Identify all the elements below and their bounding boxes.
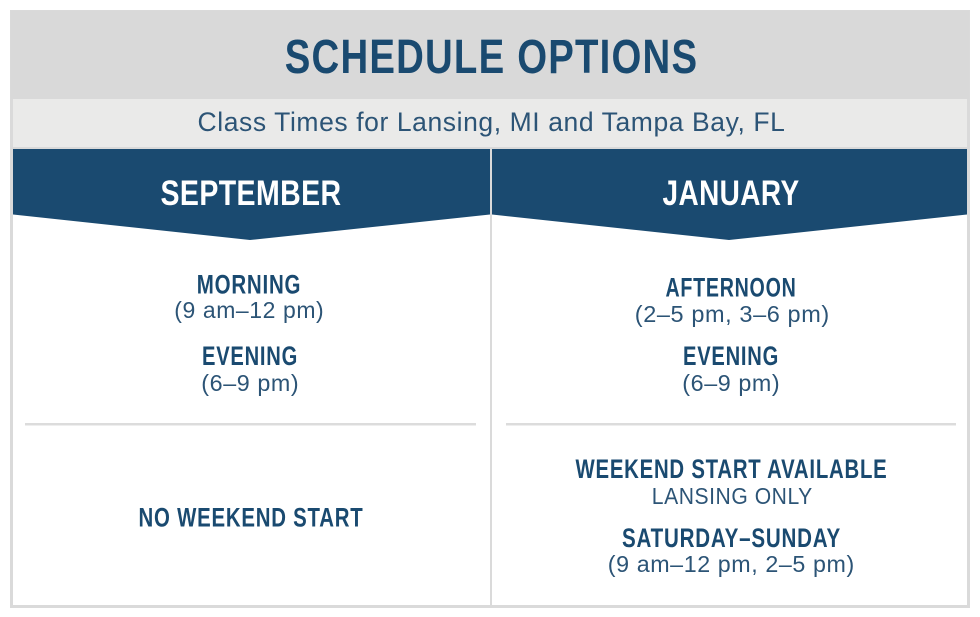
evening times — [201, 341, 299, 396]
weekend start: LANSING ONLY — [652, 483, 813, 509]
title banner — [11, 11, 969, 99]
panel: january — [492, 149, 967, 577]
morning times — [174, 270, 324, 323]
saturday sunday times: (9 am–12 pm, 2–5 pm) — [608, 551, 855, 577]
evening times: EVENING — [202, 341, 298, 371]
subtitle: Class Times for Lansing, MI and Tampa Bay, FL — [198, 107, 786, 137]
weekend start: WEEKEND START AVAILABLE — [576, 454, 888, 484]
panel: september — [13, 149, 490, 532]
evening times — [682, 341, 780, 396]
no weekend start: NO WEEKEND START — [138, 502, 364, 532]
september header — [13, 149, 490, 240]
saturday sunday times: SATURDAY–SUNDAY — [622, 523, 841, 553]
evening times: (6–9 pm) — [201, 370, 299, 396]
evening times: (6–9 pm) — [682, 370, 780, 396]
january header — [492, 149, 967, 240]
afternoon times: (2–5 pm, 3–6 pm) — [635, 301, 830, 327]
evening times: EVENING — [683, 341, 779, 371]
saturday sunday times — [608, 523, 855, 577]
january header: JANUARY — [662, 174, 800, 213]
weekend start — [576, 454, 888, 509]
morning times: MORNING — [197, 270, 301, 300]
morning times: (9 am–12 pm) — [174, 297, 324, 323]
afternoon times — [635, 272, 830, 327]
title banner: SCHEDULE OPTIONS — [285, 31, 698, 84]
afternoon times: AFTERNOON — [666, 272, 796, 302]
subtitle — [13, 99, 967, 147]
september header: SEPTEMBER — [160, 174, 342, 213]
